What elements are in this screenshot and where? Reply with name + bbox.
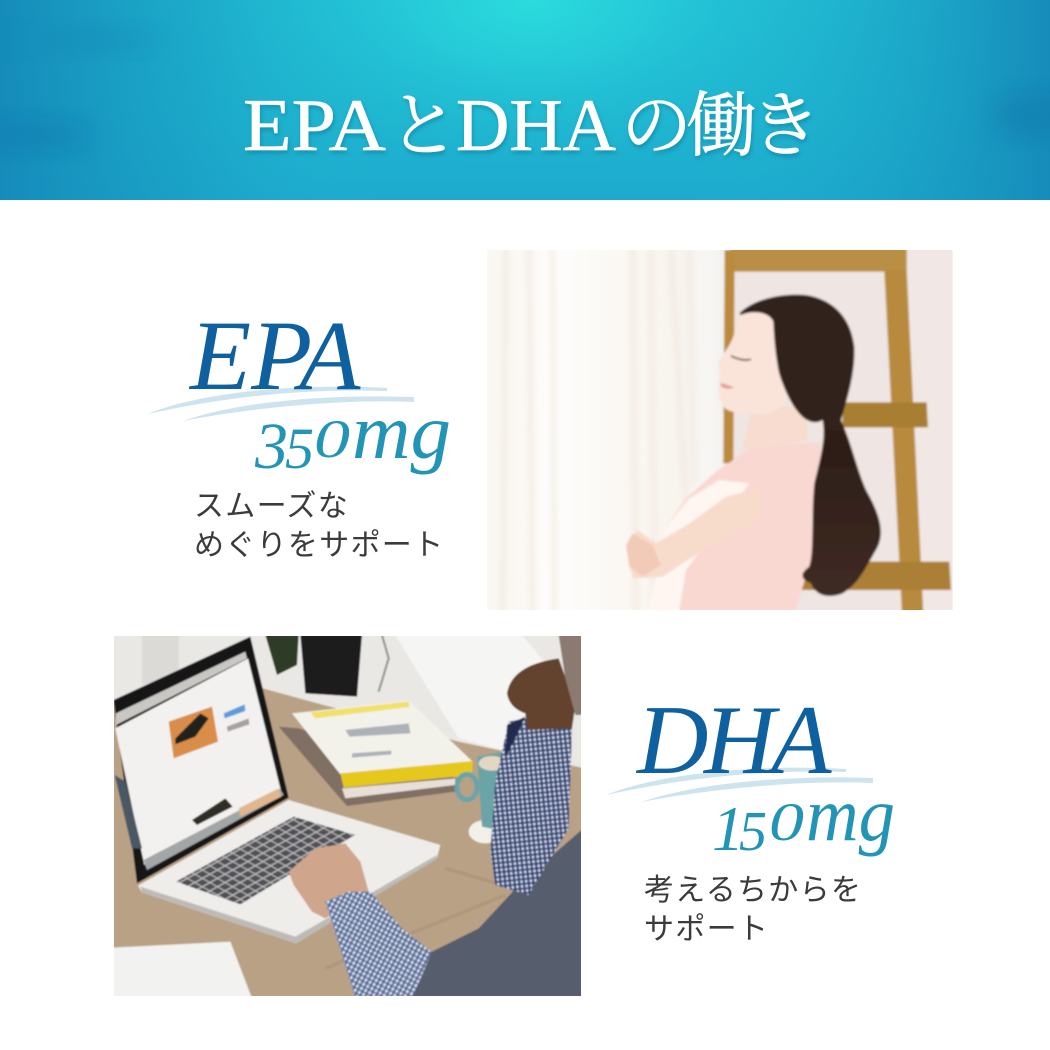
header band [0,0,1050,200]
swoosh: DHA [606,768,873,802]
EPA amount: mg [352,388,451,475]
EPA label: EPA [188,300,361,411]
EPA text block [148,300,451,562]
arm [630,492,744,579]
EPA description: めぐりをサポート [194,529,444,562]
DHA text block [606,686,895,946]
swoosh: EPA [148,387,414,421]
laptop screen [114,637,289,883]
paper [112,942,252,998]
keyboard [176,817,355,904]
sleeve [325,892,435,998]
title: と [388,88,459,166]
DHA amount: mg [806,773,895,857]
photo: laptop at desk [112,635,585,998]
DHA description: 考えるちからを [644,874,862,907]
EPA amount: 5 [285,416,314,481]
EPA description: スムーズな [194,490,349,523]
face [718,312,788,414]
plant [265,635,299,675]
title: 働 [686,88,757,166]
DHA label: DHA [635,686,832,795]
raised arm [490,718,572,895]
DHA amount: 5 [739,801,767,863]
EPA amount: 0 [314,409,350,469]
hand on chin [507,658,575,730]
DHA amount: 0 [769,792,804,852]
photo: woman stretching by curtain [476,247,959,613]
DHA description: サポート [644,913,769,946]
ladder [731,247,907,272]
curtain folds [503,247,694,613]
title: EPA [243,85,386,167]
title: の [621,88,692,166]
mug [468,820,493,844]
stack of books [279,727,457,806]
title: DHA [456,85,616,167]
hair [739,295,881,596]
title: き [750,88,821,166]
body [412,827,585,998]
typing hand [289,843,369,918]
EPA amount: 3 [254,410,288,483]
neck [743,407,808,448]
laptop base [138,800,440,943]
DHA amount: 1 [712,793,744,864]
shirt [673,443,822,610]
